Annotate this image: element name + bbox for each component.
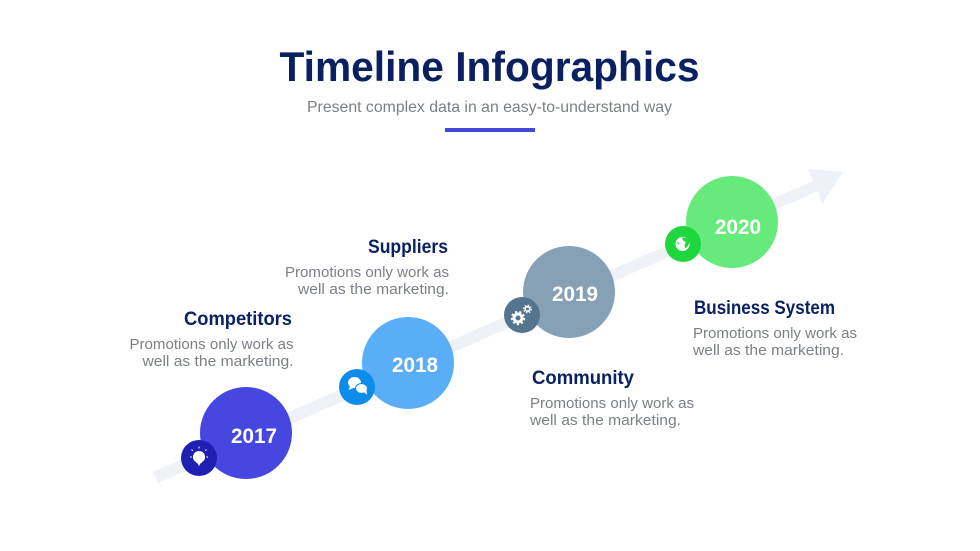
text block: Suppliers [285, 237, 449, 298]
icon: gears [504, 297, 540, 333]
year 2019: 2019 [552, 283, 598, 306]
body: Promotions only work as [693, 325, 857, 342]
circle 2017 [200, 387, 292, 479]
circle 2018 [362, 317, 454, 409]
milestone 2020 [665, 176, 778, 268]
title underline [445, 128, 535, 132]
circle 2019 [523, 246, 615, 338]
heading: Business System [694, 298, 835, 319]
body: Promotions only work as [530, 395, 694, 412]
heading: Suppliers [368, 237, 448, 258]
icon: globe [665, 226, 701, 262]
icon: chat bubbles [339, 369, 375, 405]
text block: Competitors [130, 309, 294, 370]
milestone 2018 [339, 317, 454, 409]
body: well as the marketing. [141, 353, 294, 370]
year 2020: 2020 [715, 216, 761, 239]
subtitle: Present complex data in an easy-to-understand way [307, 99, 672, 116]
heading: Competitors [184, 309, 292, 330]
circle 2020 [686, 176, 778, 268]
body: well as the marketing. [297, 281, 449, 298]
year 2018: 2018 [392, 354, 438, 377]
arrow [153, 169, 843, 483]
icon: light bulb [181, 440, 217, 476]
body: Promotions only work as [285, 264, 449, 281]
body: well as the marketing. [692, 342, 844, 359]
body: well as the marketing. [529, 412, 681, 429]
year 2017: 2017 [231, 425, 277, 448]
title: Timeline Infographics [280, 43, 700, 90]
text block: Community [529, 368, 694, 429]
heading: Community [532, 368, 634, 389]
milestone 2019 [504, 246, 615, 338]
text block: Business System [692, 298, 857, 359]
milestone 2017 [181, 387, 292, 479]
body: Promotions only work as [130, 336, 294, 353]
